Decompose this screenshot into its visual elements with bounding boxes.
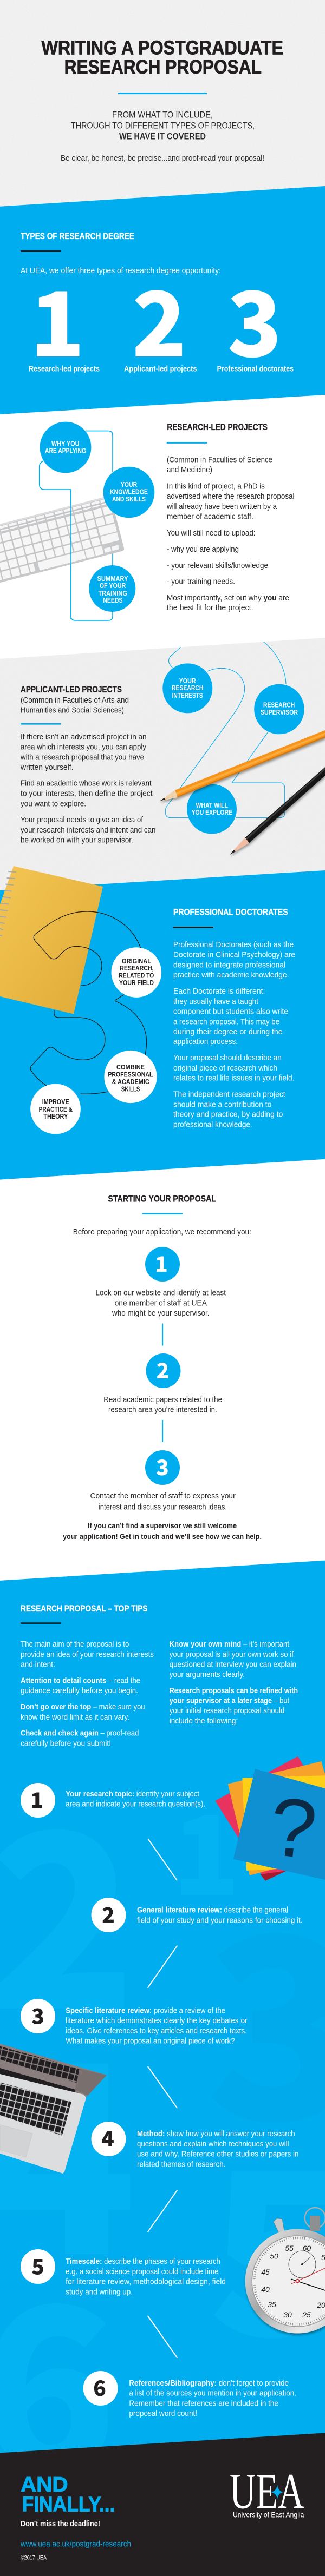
right column: your arguments clearly.	[170, 1670, 245, 1679]
tip 6: Remember that references are included in the	[129, 2399, 278, 2408]
circle: summary of your training needs: TRAINING	[98, 589, 127, 597]
circle: why you are applying: WHY YOU	[51, 439, 79, 447]
step 3: interest and discuss your research ideas.	[99, 1502, 227, 1511]
step 3	[90, 1450, 236, 1511]
tip 6: proposal word count!	[129, 2409, 197, 2418]
body text: component but students also write	[173, 1007, 288, 1016]
stopwatch numerals: 35	[268, 2300, 276, 2309]
and finally heading	[21, 2473, 115, 2516]
body text: theory and practice, by adding to	[173, 1109, 283, 1119]
heading: STARTING YOUR PROPOSAL	[108, 1194, 216, 1204]
tip 5: 5	[31, 2251, 44, 2281]
icon: yellow notebook	[0, 866, 103, 1014]
right column	[170, 1640, 298, 1726]
circle: improve practice and theory	[30, 1084, 81, 1134]
right column: questioned at interview you can explain	[170, 1660, 296, 1669]
body text: In this kind of project, a PhD is	[167, 481, 265, 491]
step 3: 3	[156, 1451, 169, 1482]
tip 6	[83, 2371, 296, 2418]
big number 3: 3	[227, 252, 282, 382]
subtitle: FROM WHAT TO INCLUDE,	[112, 110, 213, 120]
body text: Your proposal should describe an	[173, 1053, 282, 1062]
copyright: ©2017 UEA	[21, 2554, 47, 2561]
circle: your research interests: INTERESTS	[172, 691, 203, 699]
heading: TYPES OF RESEARCH DEGREE	[21, 231, 134, 241]
outline number 1 foreground stroke	[70, 490, 72, 619]
panel: types of research degree	[0, 186, 325, 414]
panel: footer	[0, 2433, 325, 2576]
body text: The independent research project	[173, 1090, 285, 1099]
stopwatch numerals: 30	[283, 2310, 292, 2319]
body text: a research proposal. This may be	[173, 1017, 280, 1026]
tip 5: e.g. a social science proposal could include time	[66, 2267, 218, 2276]
circle: combine skills: SKILLS	[121, 1085, 140, 1093]
icon: sticky notes with question mark	[215, 1756, 325, 1881]
big number 2: 2	[132, 252, 187, 382]
circle: combine skills: PROFESSIONAL	[108, 1071, 153, 1079]
circle: original research: RELATED TO	[119, 972, 154, 980]
circle: what will you explore: YOU EXPLORE	[192, 808, 232, 816]
callout: If you can’t find a supervisor we still welcome	[88, 1521, 237, 1530]
panel: top tips	[0, 1603, 325, 2418]
label: Research-led projects	[29, 365, 100, 374]
circle: improve practice and theory: THEORY	[43, 1112, 68, 1120]
panel: top tips background	[0, 1561, 325, 2456]
tip 5: for literature review, methodological design, field	[66, 2277, 226, 2287]
circle: why you are applying: ARE APPLYING	[45, 447, 86, 455]
body text: (Common in Faculties of Science	[167, 455, 272, 465]
body text: relates to real life issues in your field.	[173, 1074, 294, 1083]
body text: Your proposal needs to give an idea of	[21, 815, 144, 824]
body text: Doctorate in Clinical Psychology) are	[173, 950, 295, 960]
body text: - why you are applying	[167, 545, 239, 554]
heading: RESEARCH PROPOSAL – TOP TIPS	[21, 1603, 147, 1614]
tip 3	[21, 1999, 248, 2046]
intro text: At UEA, we offer three types of research degree opportunity:	[21, 266, 221, 275]
circle: research supervisor: RESEARCH	[263, 701, 295, 709]
tip 3: literature which demonstrates clearly the key debates or	[66, 2016, 248, 2025]
step 1: one member of staff at UEA	[115, 1298, 207, 1308]
left column: guidance carefully before you begin.	[21, 1686, 138, 1695]
tip 4: 4	[101, 2123, 114, 2153]
circle: summary of your training needs	[89, 565, 135, 612]
body text: the best fit for the project.	[167, 603, 253, 612]
body text: member of academic staff.	[167, 512, 253, 521]
left column: Check and check again – proof-read	[21, 1729, 139, 1738]
body text: - your training needs.	[167, 577, 235, 586]
body text: professional knowledge.	[173, 1120, 252, 1130]
stopwatch numerals: 55	[285, 2244, 294, 2253]
step 2	[103, 1353, 222, 1415]
and finally heading: FINALLY...	[22, 2493, 115, 2516]
tagline: Be clear, be honest, be precise...and proof-read your proposal!	[61, 154, 264, 163]
stopwatch numerals: 60	[303, 2244, 311, 2253]
body text: with a research proposal that you have	[20, 753, 144, 762]
body text: original piece of research which	[173, 1064, 277, 1073]
circle: what will you explore	[187, 784, 237, 834]
deadline line: Don’t miss the deadline!	[21, 2519, 100, 2528]
body text: you want to explore.	[21, 800, 86, 809]
heading: APPLICANT-LED PROJECTS	[21, 684, 122, 695]
tip 1: 1	[30, 1784, 43, 1814]
circle: your research interests	[162, 663, 212, 713]
left column: Don’t go over the top – make sure you	[21, 1702, 145, 1712]
icon: black pencil	[230, 767, 325, 855]
circle: your knowledge and skills	[103, 467, 154, 518]
left column: know the word limit as it can vary.	[21, 1713, 129, 1722]
tip 5	[21, 2249, 226, 2296]
and finally heading: AND	[21, 2473, 68, 2496]
connector arrows	[148, 1839, 177, 2357]
title: RESEARCH PROPOSAL	[64, 56, 262, 78]
label: Professional doctorates	[217, 365, 294, 374]
body text: and Medicine)	[167, 465, 212, 474]
step 3: Contact the member of staff to express your	[90, 1491, 236, 1501]
left column: Attention to detail counts – read the	[21, 1676, 140, 1685]
body text	[166, 455, 295, 612]
tip 3: 3	[31, 2000, 44, 2031]
icon: sticky notes with question mark: ?	[265, 1780, 321, 1877]
circle: original research: YOUR FIELD	[119, 979, 154, 987]
icon: stopwatch	[245, 2208, 325, 2334]
circle: combine skills: & ACADEMIC	[112, 1078, 150, 1086]
tip 6: 6	[93, 2372, 106, 2402]
body text: If there isn’t an advertised project in an	[21, 732, 147, 742]
logo: University of East Anglia: University of East Anglia	[233, 2510, 304, 2519]
right column: your proposal is all your own work so if	[170, 1650, 294, 1659]
left column: provide an idea of your research interests	[21, 1650, 154, 1659]
body text: will already have been written by a	[166, 502, 277, 511]
left column: and intent:	[21, 1660, 55, 1669]
body text: practice with academic knowledge.	[173, 970, 289, 980]
tip 2	[91, 1898, 303, 1932]
circle: research supervisor: SUPERVISOR	[261, 708, 298, 716]
body text: to your interests, then define the project	[21, 789, 153, 798]
circle: improve practice and theory: IMPROVE	[42, 1098, 69, 1106]
right column: include the following:	[170, 1716, 238, 1726]
tip 3: ideas. Give references to key articles and research texts.	[66, 2026, 247, 2036]
panel: professional doctorates	[0, 866, 325, 1180]
circle: why you are applying	[40, 422, 91, 473]
stopwatch numerals	[261, 2244, 325, 2319]
tip 4: related themes of research.	[137, 2159, 225, 2169]
heading: Humanities and Social Sciences)	[21, 706, 124, 715]
outline number 1	[40, 431, 113, 620]
circle: summary of your training needs: OF YOUR	[100, 582, 126, 590]
body text: You will still need to upload:	[167, 529, 256, 538]
stopwatch numerals: 45	[261, 2268, 270, 2276]
icon: orange pencil	[160, 730, 325, 801]
website: www.uea.ac.uk/postgrad-research	[20, 2539, 131, 2548]
subtitle: THROUGH TO DIFFERENT TYPES OF PROJECTS,	[71, 121, 255, 131]
step 2: 2	[157, 1355, 169, 1385]
callout	[63, 1521, 262, 1541]
panel: applicant-led projects	[20, 642, 325, 855]
circle: your knowledge and skills: YOUR	[121, 480, 138, 488]
stopwatch numerals: 50	[270, 2251, 278, 2260]
step 1: Look on our website and identify at least	[95, 1288, 226, 1297]
body text: Find an academic whose work is relevant	[21, 779, 152, 788]
tip 2: General literature review: describe the general	[137, 1906, 288, 1915]
circle: improve practice and theory: PRACTICE &	[39, 1105, 73, 1113]
keyboard	[0, 496, 125, 595]
label: Applicant-led projects	[124, 365, 197, 374]
title: WRITING A POSTGRADUATE	[41, 37, 283, 58]
tip 4	[91, 2122, 299, 2169]
right column: your initial research proposal should	[170, 1706, 284, 1715]
outline number 2	[166, 642, 286, 818]
stopwatch numerals: 40	[261, 2285, 270, 2294]
body text: advertised where the research proposal	[167, 492, 295, 501]
body text: Professional Doctorates (such as the	[173, 940, 294, 949]
body text: designed to integrate professional	[173, 960, 285, 969]
step 2: Read academic papers related to the	[103, 1395, 222, 1404]
tip 1	[21, 1783, 205, 1818]
step 2: research area you’re interested in.	[108, 1405, 217, 1415]
subtitle	[71, 110, 255, 142]
tip 4: use and why. Reference other studies or papers in	[137, 2150, 299, 2159]
tip 5: Timescale: describe the phases of your research	[66, 2257, 220, 2266]
body text: Most importantly, set out why you are	[167, 593, 289, 603]
body text	[173, 940, 295, 1130]
panel: applicant-led background	[0, 638, 325, 890]
body text: your research interests and intent and can	[21, 825, 155, 835]
circle: original research: ORIGINAL	[122, 957, 151, 965]
panel: starting your proposal	[63, 1194, 262, 1541]
circle: what will you explore: WHAT WILL	[196, 801, 228, 809]
body text	[20, 732, 155, 845]
big number 1: 1	[30, 252, 85, 382]
circle: your research interests: YOUR	[179, 677, 196, 685]
panel: header background	[0, 0, 325, 216]
tip 2: field of your study and your reasons for choosing it.	[137, 1916, 303, 1925]
body text: written yourself.	[20, 763, 74, 772]
callout: your application! Get in touch and we’ll see how we can help.	[63, 1532, 262, 1541]
tip 1: area and indicate your research question(s).	[66, 1800, 205, 1809]
watermark numbers	[0, 1728, 325, 2538]
body text: they usually have a taught	[173, 997, 259, 1006]
right column: Know your own mind – it’s important	[170, 1640, 290, 1649]
heading: (Common in Faculties of Arts and	[21, 696, 129, 705]
icon: laptop	[0, 2044, 107, 2174]
tip 2: 2	[102, 1899, 115, 1929]
tip 3: What makes your proposal an original piece of work?	[66, 2037, 235, 2046]
circle: combine skills	[104, 1051, 157, 1103]
circle: combine skills: COMBINE	[116, 1063, 145, 1071]
circle: summary of your training needs: NEEDS	[103, 596, 123, 604]
body text: area which interests you, you can apply	[21, 743, 146, 752]
body text: Each Doctorate is different:	[173, 987, 265, 996]
step 1	[95, 1247, 226, 1318]
tip 6: a list of the sources you mention in your application.	[129, 2389, 296, 2398]
left column	[21, 1640, 154, 1748]
body text: application process.	[173, 1037, 238, 1046]
tip 1: Your research topic: identify your subject	[66, 1789, 200, 1799]
stopwatch numerals: 25	[302, 2310, 311, 2319]
body text: be worked on with your supervisor.	[21, 836, 133, 845]
subtitle: WE HAVE IT COVERED	[119, 132, 206, 142]
step 1: who might be your supervisor.	[112, 1309, 209, 1318]
body text: - your relevant skills/knowledge	[167, 561, 268, 570]
outline number 3	[30, 911, 147, 1094]
circle: your knowledge and skills: KNOWLEDGE	[110, 488, 148, 496]
heading: RESEARCH-LED PROJECTS	[167, 422, 268, 432]
panel: title block	[41, 37, 283, 163]
body text: during their degree or during the	[173, 1027, 283, 1036]
title	[41, 37, 283, 78]
intro text: Before preparing your application, we recommend you:	[73, 1227, 251, 1237]
body text: should make a contribution to	[173, 1100, 271, 1109]
right column: Research proposals can be refined with	[170, 1686, 298, 1695]
left column: The main aim of the proposal is to	[21, 1640, 129, 1649]
notebook spiral	[0, 871, 16, 936]
right column: your supervisor at a later stage – but	[170, 1696, 290, 1706]
left column: carefully before you submit!	[21, 1739, 111, 1748]
circle: your knowledge and skills: AND SKILLS	[112, 495, 146, 503]
tip 4: questions and explain which techniques you will	[137, 2139, 289, 2149]
tip 3: Specific literature review: provide a review of the	[66, 2006, 225, 2015]
circle: summary of your training needs: SUMMARY	[98, 574, 128, 583]
panel: research-led projects	[0, 422, 295, 620]
tip 4: Method: show how you will answer your research	[137, 2129, 295, 2138]
circle: original research: RESEARCH,	[120, 964, 154, 972]
tip 5: study and writing up.	[66, 2287, 133, 2296]
circle: your research interests: RESEARCH	[172, 684, 203, 692]
heading	[21, 684, 129, 715]
watermark numbers: 1	[173, 1767, 240, 1927]
step 1: 1	[155, 1248, 168, 1278]
circle: original research	[112, 947, 161, 998]
circle: research supervisor	[254, 684, 304, 734]
heading: PROFESSIONAL DOCTORATES	[173, 907, 288, 917]
tip 6: References/Bibliography: don’t forget to provide	[129, 2379, 289, 2388]
